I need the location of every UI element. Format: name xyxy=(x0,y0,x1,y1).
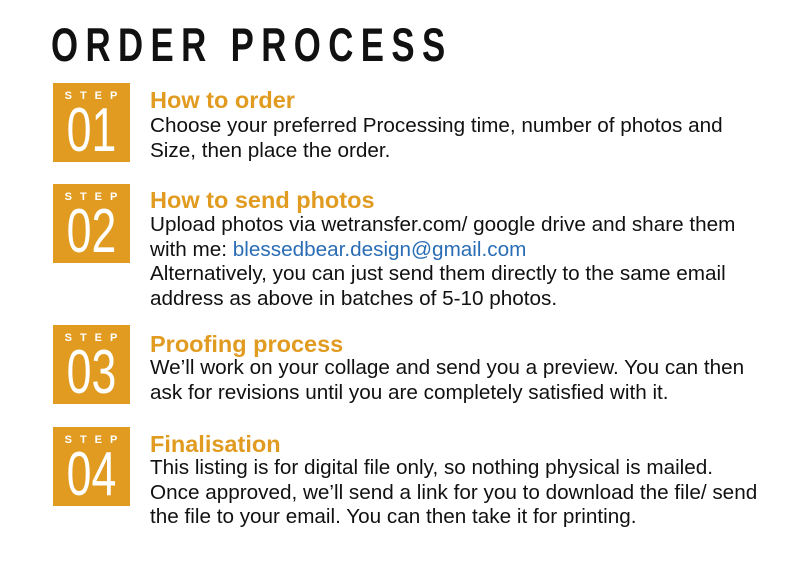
step 2 box: STEP xyxy=(65,191,125,203)
step 1 text: Choose your preferred Processing time, number of photos and xyxy=(150,114,723,137)
step 2 text: address as above in batches of 5-10 photos. xyxy=(150,286,557,310)
step 3 box: 03 xyxy=(67,338,116,407)
step 2 text: Upload photos via wetransfer.com/ google drive and share them xyxy=(150,213,735,236)
step 4 heading: Finalisation xyxy=(150,431,281,457)
step 1 heading: How to order xyxy=(150,87,295,113)
step 3 text: We’ll work on your collage and send you a preview. You can then xyxy=(150,356,744,379)
step 3 text: ask for revisions until you are completely satisfied with it. xyxy=(150,380,669,404)
title: ORDER PROCESS xyxy=(51,18,453,71)
step 4 text xyxy=(150,456,757,528)
step 2 text xyxy=(150,213,735,310)
step 1 text: Size, then place the order. xyxy=(150,138,390,162)
step 1 text xyxy=(150,114,723,162)
step 4 text: Once approved, we’ll send a link for you to download the file/ send xyxy=(150,480,757,504)
step 2 text: Alternatively, you can just send them directly to the same email xyxy=(150,262,726,285)
step 3 box: STEP xyxy=(65,332,125,344)
step 1 box: STEP xyxy=(65,90,125,102)
step 2 box xyxy=(53,184,130,263)
step 4 text: the file to your email. You can then take it for printing. xyxy=(150,505,636,528)
step 4 box xyxy=(53,427,130,506)
step 4 box: STEP xyxy=(65,434,125,446)
step 2 text: with me: blessedbear.design@gmail.com xyxy=(150,238,526,260)
step 4 box: 04 xyxy=(67,440,116,509)
step 3 heading: Proofing process xyxy=(150,331,343,357)
step 1 box xyxy=(53,83,130,162)
step 4 text: This listing is for digital file only, so nothing physical is mailed. xyxy=(150,456,713,479)
step 1 box: 01 xyxy=(67,96,116,165)
step 3 box xyxy=(53,325,130,404)
step 3 text xyxy=(150,356,744,404)
step 2 heading: How to send photos xyxy=(150,187,375,213)
step 2 box: 02 xyxy=(67,197,116,266)
